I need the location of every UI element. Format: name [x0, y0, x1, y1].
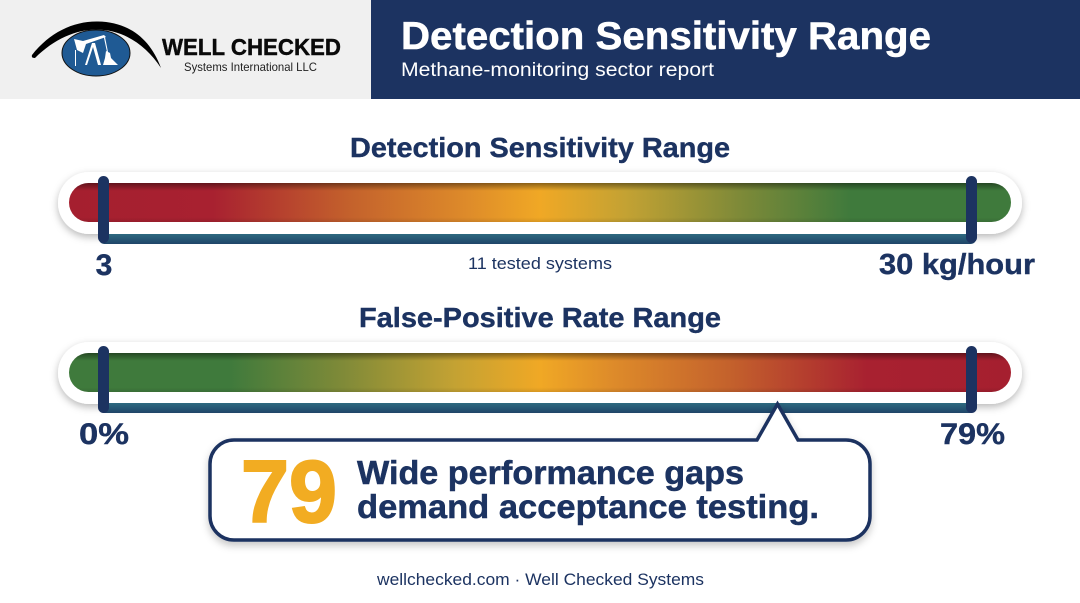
- heading: false-positive: False-Positive Rate Range: [359, 302, 721, 333]
- panel: detection sensitivity range: [58, 132, 1035, 282]
- gradient bar: sensitivity: [58, 172, 1022, 234]
- label: tested systems: 11 tested systems: [468, 254, 612, 273]
- footer: wellchecked.com · Well Checked Systems: [376, 570, 704, 589]
- label: maximum 79%: 79%: [940, 418, 1005, 451]
- logo wordmark: WELL CHECKED: [162, 34, 341, 60]
- label: maximum 30 kg/hour: 30 kg/hour: [879, 249, 1035, 281]
- logo subtitle: Systems International LLC: [184, 60, 317, 74]
- header title: Detection Sensitivity Range: [401, 15, 931, 58]
- callout: [210, 404, 870, 541]
- label: minimum 0%: 0%: [79, 418, 129, 451]
- panel: false-positive rate range: [58, 302, 1022, 451]
- icon: oil pump eye logo: [32, 21, 161, 76]
- callout message: Wide performance gaps: [357, 454, 744, 491]
- header logo panel: [0, 0, 371, 99]
- heading: detection sensitivity: Detection Sensitivity Range: [350, 132, 730, 163]
- range bracket: sensitivity: [98, 176, 977, 244]
- callout message: [357, 454, 819, 525]
- big number 79: 79: [241, 442, 337, 541]
- label: minimum 3: 3: [96, 249, 112, 282]
- gradient bar: false-positive: [58, 342, 1022, 404]
- header subtitle: Methane-monitoring sector report: [401, 60, 715, 81]
- range bracket: false-positive: [98, 346, 977, 413]
- header title panel: [371, 0, 1080, 99]
- callout message: demand acceptance testing.: [357, 488, 819, 525]
